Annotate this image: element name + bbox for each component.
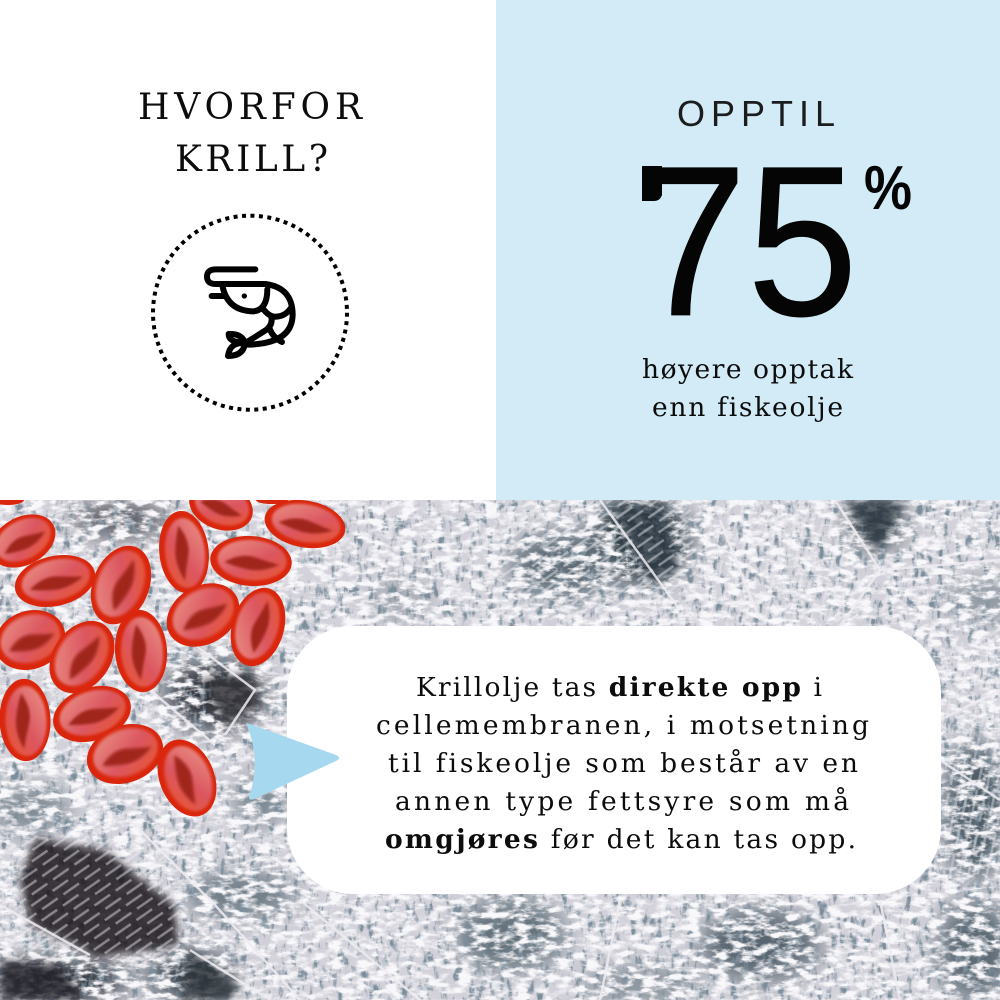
icon: shrimp in dotted circle [153,216,347,410]
callout text [376,672,869,855]
dark ice patch [0,502,905,1000]
label: OPPTIL: OPPTIL [677,93,835,134]
callout text: cellemembranen, i motsetning [376,710,869,741]
callout text: Krillolje tas direkte opp i [416,672,822,703]
percent sign: % [864,154,912,223]
red krill oil capsules [0,500,346,816]
caption: higher uptake than fish oil: høyere opptak [642,354,854,385]
heading: Hvorfor krill?: KRILL? [175,139,328,180]
callout text: til fiskeolje som består av en [388,748,858,779]
crystal hatching [20,500,1000,960]
crack lines [0,500,1000,1000]
callout: white speech bubble [287,626,941,894]
heading: Hvorfor krill?: HVORFOR [138,87,363,128]
speech bubble pointer [246,723,339,800]
left panel: white background [0,0,496,500]
photo: frosted ice background [0,496,1000,1000]
callout text: annen type fettsyre som må [395,786,849,817]
right panel: light blue background [496,0,1000,500]
big number: 75: 75 [636,122,858,361]
heading: Hvorfor krill? [138,87,363,180]
caption: higher uptake than fish oil: enn fiskeolje [652,392,843,423]
callout text: omgjøres før det kan tas opp. [385,824,856,855]
caption: higher uptake than fish oil [642,354,854,423]
